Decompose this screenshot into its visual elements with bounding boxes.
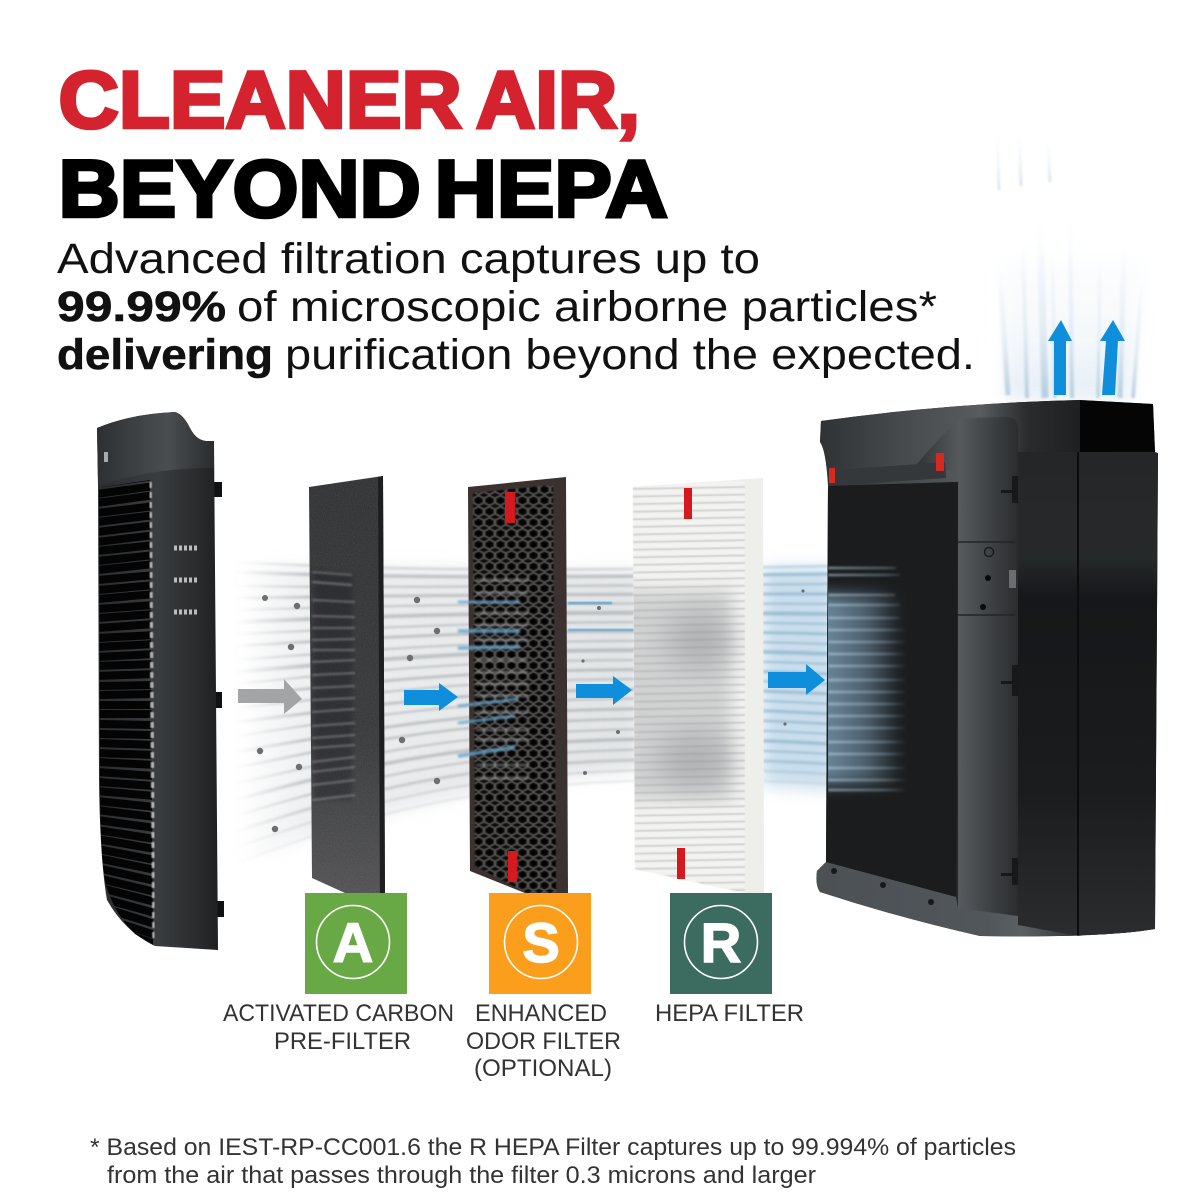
footnote: * Based on IEST-RP-CC001.6 the R HEPA Filter captures up to 99.994% of particles: [90, 1134, 1016, 1161]
filter: activated carbon pre-filter: [309, 476, 385, 893]
panel top cap: [97, 412, 214, 486]
filter: hepa: [622, 478, 764, 893]
air particles: [257, 589, 805, 832]
subtitle text block: [57, 235, 975, 379]
panel body: [97, 412, 218, 950]
subtitle text block: of microscopic airborne particles*: [237, 283, 937, 331]
badge: activated carbon: [305, 893, 407, 994]
footnote: [90, 1134, 1016, 1189]
badge: hepa: R: [701, 911, 741, 974]
air haze through hepa: [622, 590, 734, 800]
grille louvers: [97, 476, 155, 944]
arrow: blue into purifier: [768, 664, 825, 695]
red tab top: [505, 492, 515, 523]
blue air entering purifier: [828, 565, 904, 796]
label: enhanced odor filter: ENHANCED: [475, 1000, 607, 1027]
filter: enhanced odor filter: [458, 477, 568, 893]
arrow: blue after pre-filter: [404, 683, 458, 711]
badge: activated carbon: A: [333, 911, 373, 974]
red latch right: [936, 453, 944, 471]
base: [816, 862, 1155, 936]
title line: cleaner air: [59, 56, 640, 146]
label: activated carbon pre-filter: [223, 1000, 454, 1055]
subtitle text block: purification beyond the expected.: [285, 331, 975, 379]
title line: beyond hepa: HEPA: [435, 144, 668, 234]
pass-through streaks: [312, 572, 355, 800]
arrow: upward right: [1100, 320, 1125, 395]
tabs: [214, 482, 224, 917]
main top shell: [820, 400, 1080, 486]
subtitle text block: Advanced filtration captures up to: [57, 235, 760, 283]
side latches: [1001, 476, 1018, 885]
arrow: blue after odor filter: [576, 676, 632, 705]
title line: beyond hepa: [59, 144, 668, 234]
rear divider: [1077, 452, 1079, 935]
front grille panel: [97, 412, 224, 950]
label: activated carbon pre-filter: ACTIVATED CARBON: [223, 1000, 454, 1027]
label: activated carbon pre-filter: PRE-FILTER: [274, 1028, 411, 1055]
side column: [912, 417, 1018, 925]
filter cavity: [826, 482, 958, 897]
label: enhanced odor filter: (OPTIONAL): [474, 1055, 612, 1082]
badge: enhanced odor: [489, 893, 591, 994]
badge: hepa: [670, 893, 772, 994]
red latch left: [829, 468, 835, 483]
subtitle text block: 99.99%: [57, 283, 226, 331]
handle bar: [830, 462, 946, 486]
upward clean air streams: [997, 130, 1145, 400]
logo: [104, 452, 108, 462]
rear body: [1018, 452, 1158, 935]
red tab bottom: [508, 851, 517, 882]
badge: enhanced odor: S: [522, 911, 560, 974]
silhouette: [816, 400, 1158, 936]
base bolts: [831, 868, 934, 905]
blue streaks after odor filter: [568, 603, 636, 630]
arrow: gray incoming air: [238, 679, 302, 714]
title line: cleaner air: AIR,: [476, 56, 640, 146]
red tab top: [684, 488, 692, 519]
control lights: [174, 548, 198, 612]
label: hepa filter: HEPA FILTER: [655, 1000, 804, 1027]
label: enhanced odor filter: ODOR FILTER: [466, 1028, 621, 1055]
title line: beyond hepa: BEYOND: [59, 144, 421, 234]
pass-through light bands: [476, 580, 528, 778]
title: [59, 56, 668, 234]
top black cap: [1078, 400, 1155, 452]
red tab bottom: [677, 848, 685, 879]
label: enhanced odor filter: [466, 1000, 621, 1082]
airflow streams: [235, 562, 835, 864]
title line: cleaner air: CLEANER: [59, 56, 462, 146]
footnote: from the air that passes through the filter 0.3 microns and larger: [107, 1162, 816, 1189]
pass-through haze: [314, 570, 352, 800]
side control details: [958, 542, 1016, 615]
purifier unit: [810, 400, 1158, 936]
arrow: upward left: [1048, 320, 1072, 395]
grille light edge: [150, 482, 154, 940]
subtitle text block: delivering: [57, 331, 273, 379]
blue streaks: [458, 602, 520, 756]
